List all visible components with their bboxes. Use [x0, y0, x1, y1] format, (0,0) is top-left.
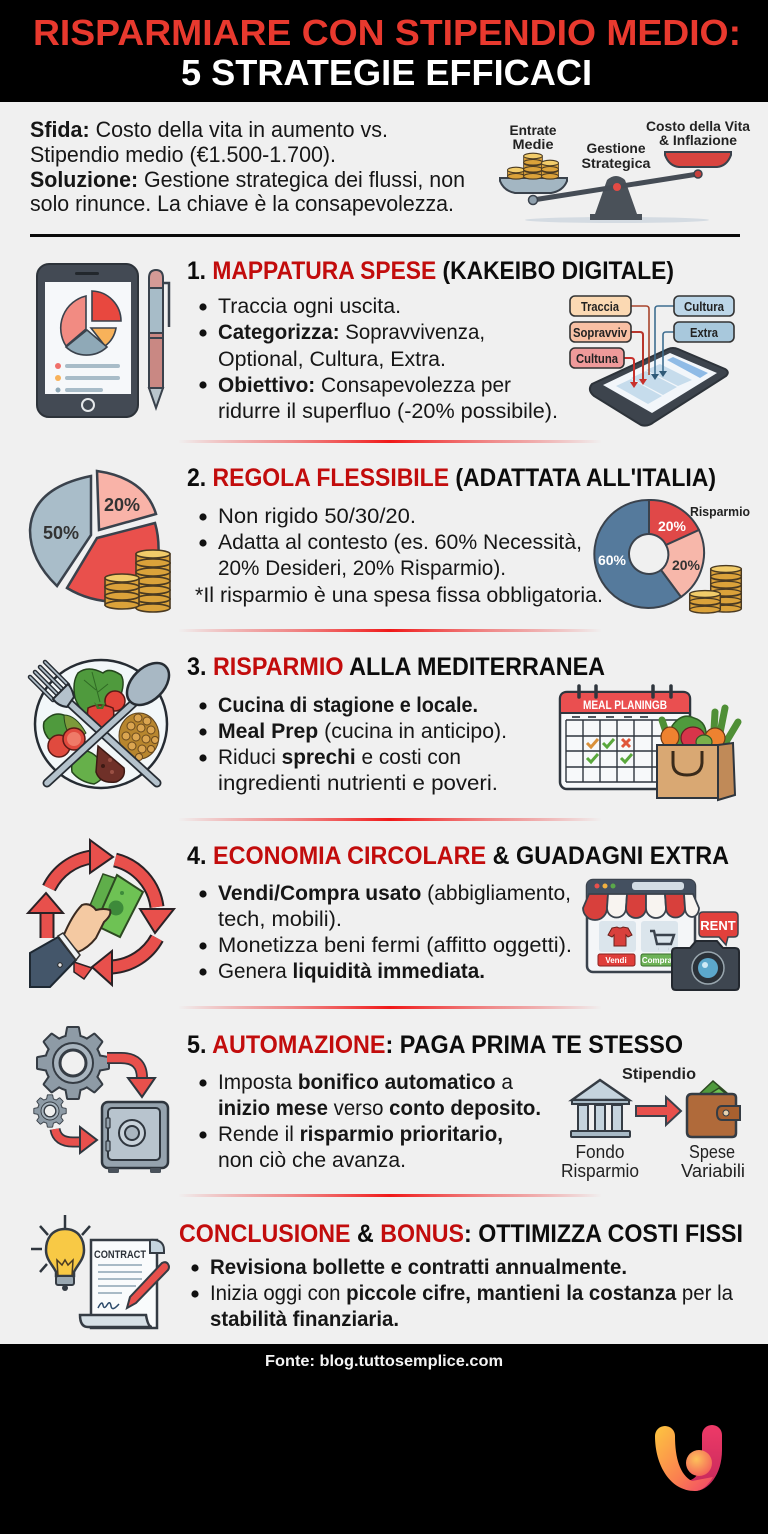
separator: [178, 629, 602, 632]
intro text block: Sfida: Costo della vita in aumento vs.: [30, 117, 388, 142]
bullets: section 1: ridurre il superfluo (-20% possibile).: [218, 399, 558, 423]
separator: [178, 818, 602, 821]
icon: balance scale: Strategica: [582, 155, 651, 171]
diagram: salary flow from savings fund to wallet: Risparmio: [561, 1161, 639, 1181]
icon: balance scale: Medie: [512, 136, 554, 152]
panel: section 5: [34, 1028, 745, 1181]
bullets: section 5: Imposta bonifico automatico a: [218, 1070, 513, 1094]
chart: pie with coins: 20%: [104, 495, 140, 515]
diagram: salary flow from savings fund to wallet: Fondo: [576, 1142, 624, 1162]
bullets: section 3: Cucina di stagione e locale.: [218, 693, 478, 717]
chart: donut 60/20/20 with coins: Risparmio: [690, 504, 750, 519]
bullets: section 2: *Il risparmio è una spesa fissa obbligatoria.: [195, 583, 603, 607]
bullets: conclusion: Revisiona bollette e contratti annualmente.: [210, 1255, 627, 1279]
icon: balance scale: Entrate: [510, 122, 557, 138]
diagram: salary flow from savings fund to wallet: Stipendio: [622, 1066, 696, 1083]
title: RISPARMIARE CON STIPENDIO MEDIO:: [33, 12, 741, 53]
bullets: conclusion: stabilità finanziaria.: [210, 1307, 399, 1331]
bullets: section 4: [199, 881, 572, 983]
icon: online store with rent tag and camera: Compra: [642, 956, 673, 965]
bullets: section 4: Genera liquidità immediata.: [218, 959, 485, 983]
logo: [655, 1425, 722, 1491]
panel: section 4: [28, 840, 739, 990]
heading: section 3: 3. RISPARMIO ALLA MEDITERRANEA: [187, 653, 605, 681]
diagram: expense categories to tablet: Cultura: [684, 299, 725, 314]
bullets: section 1: Categorizza: Sopravvivenza,: [218, 320, 485, 344]
icon: balance scale: & Inflazione: [659, 132, 737, 148]
bullets: section 1: [199, 294, 558, 423]
chart: donut 60/20/20 with coins: 20%: [672, 557, 701, 573]
diagram: expense categories to tablet: Traccia: [581, 299, 620, 314]
source text: Fonte: blog.tuttosemplice.com: [265, 1353, 503, 1370]
chart: donut 60/20/20 with coins: 60%: [598, 552, 627, 568]
icon: plate with fork and spoon: [30, 655, 177, 788]
intro text block: solo rinunce. La chiave è la consapevolezza.: [30, 191, 454, 216]
separator: [178, 440, 602, 443]
icon: balance scale: Gestione: [586, 140, 646, 156]
icon: pen: [149, 270, 169, 408]
diagram: expense categories to tablet: Sopravviv: [573, 325, 628, 340]
bullets: section 4: Vendi/Compra usato (abbigliamento,: [218, 881, 571, 905]
icon: lightbulb: [31, 1215, 90, 1291]
bullets: section 4: tech, mobili).: [218, 907, 342, 931]
chart: donut 60/20/20 with coins: 20%: [658, 518, 687, 534]
icon: online store with rent tag and camera: RENT: [700, 918, 736, 933]
bullets: section 1: Optional, Cultura, Extra.: [218, 347, 446, 371]
header band: [0, 0, 768, 102]
bullets: section 3: [199, 693, 507, 795]
heading: section 4: 4. ECONOMIA CIRCOLARE & GUADAGNI EXTRA: [187, 842, 729, 870]
diagram: expense categories to tablet: [570, 296, 734, 426]
bullets: section 3: ingredienti nutrienti e poveri.: [218, 771, 498, 795]
separator: [178, 1006, 602, 1009]
icon: online store with rent tag and camera: Vendi: [605, 956, 627, 965]
panel: section 2: [30, 464, 750, 613]
icon: gears, arrows and safe: [34, 1028, 168, 1173]
heading: section 5: 5. AUTOMAZIONE: PAGA PRIMA TE STESSO: [187, 1031, 683, 1059]
bullets: section 5: [199, 1070, 541, 1172]
bullets: conclusion: Inizia oggi con piccole cifre, mantieni la costanza per la: [210, 1281, 733, 1305]
chart: pie with coins: [30, 471, 170, 612]
panel: section 1: [37, 257, 734, 426]
title: [33, 12, 741, 93]
bullets: section 2: Adatta al contesto (es. 60% Necessità,: [218, 530, 582, 554]
bullets: section 3: Meal Prep (cucina in anticipo).: [218, 719, 507, 743]
icon: balance scale: Costo della Vita: [646, 118, 750, 134]
panel: conclusion: [31, 1215, 743, 1331]
heading: section 2: 2. REGOLA FLESSIBILE (ADATTATA ALL'ITALIA): [187, 464, 716, 492]
diagram: salary flow from savings fund to wallet: [561, 1066, 745, 1181]
bullets: section 1: Traccia ogni uscita.: [218, 294, 401, 318]
diagram: expense categories to tablet: Extra: [690, 325, 719, 340]
diagram: expense categories to tablet: Cultuna: [576, 351, 619, 366]
divider: [30, 234, 740, 237]
title: 5 STRATEGIE EFFICACI: [181, 52, 592, 93]
icon: contract with pen: [80, 1240, 169, 1328]
bullets: section 1: Obiettivo: Consapevolezza per: [218, 373, 511, 397]
bullets: conclusion: [191, 1255, 733, 1331]
footer band: [0, 1344, 768, 1534]
intro text block: [30, 117, 465, 216]
heading: conclusion: CONCLUSIONE & BONUS: OTTIMIZZA COSTI FISSI: [179, 1220, 743, 1248]
icon: meal planning calendar and grocery bag: [560, 686, 738, 800]
bullets: section 4: Monetizza beni fermi (affitto oggetti).: [218, 933, 572, 957]
bullets: section 2: [195, 504, 603, 607]
icon: balance scale: [500, 118, 750, 223]
bullets: section 2: Non rigido 50/30/20.: [218, 504, 416, 528]
chart: pie with coins: 50%: [43, 523, 79, 543]
intro text block: Stipendio medio (€1.500-1.700).: [30, 142, 336, 167]
diagram: salary flow from savings fund to wallet: Variabili: [681, 1161, 745, 1181]
bullets: section 5: inizio mese verso conto deposito.: [218, 1096, 541, 1120]
chart: donut 60/20/20 with coins: [594, 500, 750, 613]
intro text block: Soluzione: Gestione strategica dei flussi, non: [30, 167, 465, 192]
diagram: salary flow from savings fund to wallet: Spese: [689, 1142, 735, 1162]
bullets: section 2: 20% Desideri, 20% Risparmio).: [218, 556, 506, 580]
bullets: section 3: Riduci sprechi e costi con: [218, 745, 461, 769]
icon: tablet with pie chart: [37, 264, 138, 417]
panel: section 3: [30, 653, 738, 800]
heading: section 1: 1. MAPPATURA SPESE (KAKEIBO DIGITALE): [187, 257, 674, 285]
icon: online store with rent tag and camera: [583, 880, 739, 990]
icon: contract with pen: CONTRACT: [94, 1249, 146, 1261]
bullets: section 5: non ciò che avanza.: [218, 1148, 406, 1172]
icon: meal planning calendar and grocery bag: MEAL PLANINGB: [583, 698, 667, 712]
bullets: section 5: Rende il risparmio prioritario,: [218, 1122, 503, 1146]
separator: [178, 1194, 602, 1197]
icon: circular arrows with hand holding cash: [28, 840, 174, 987]
